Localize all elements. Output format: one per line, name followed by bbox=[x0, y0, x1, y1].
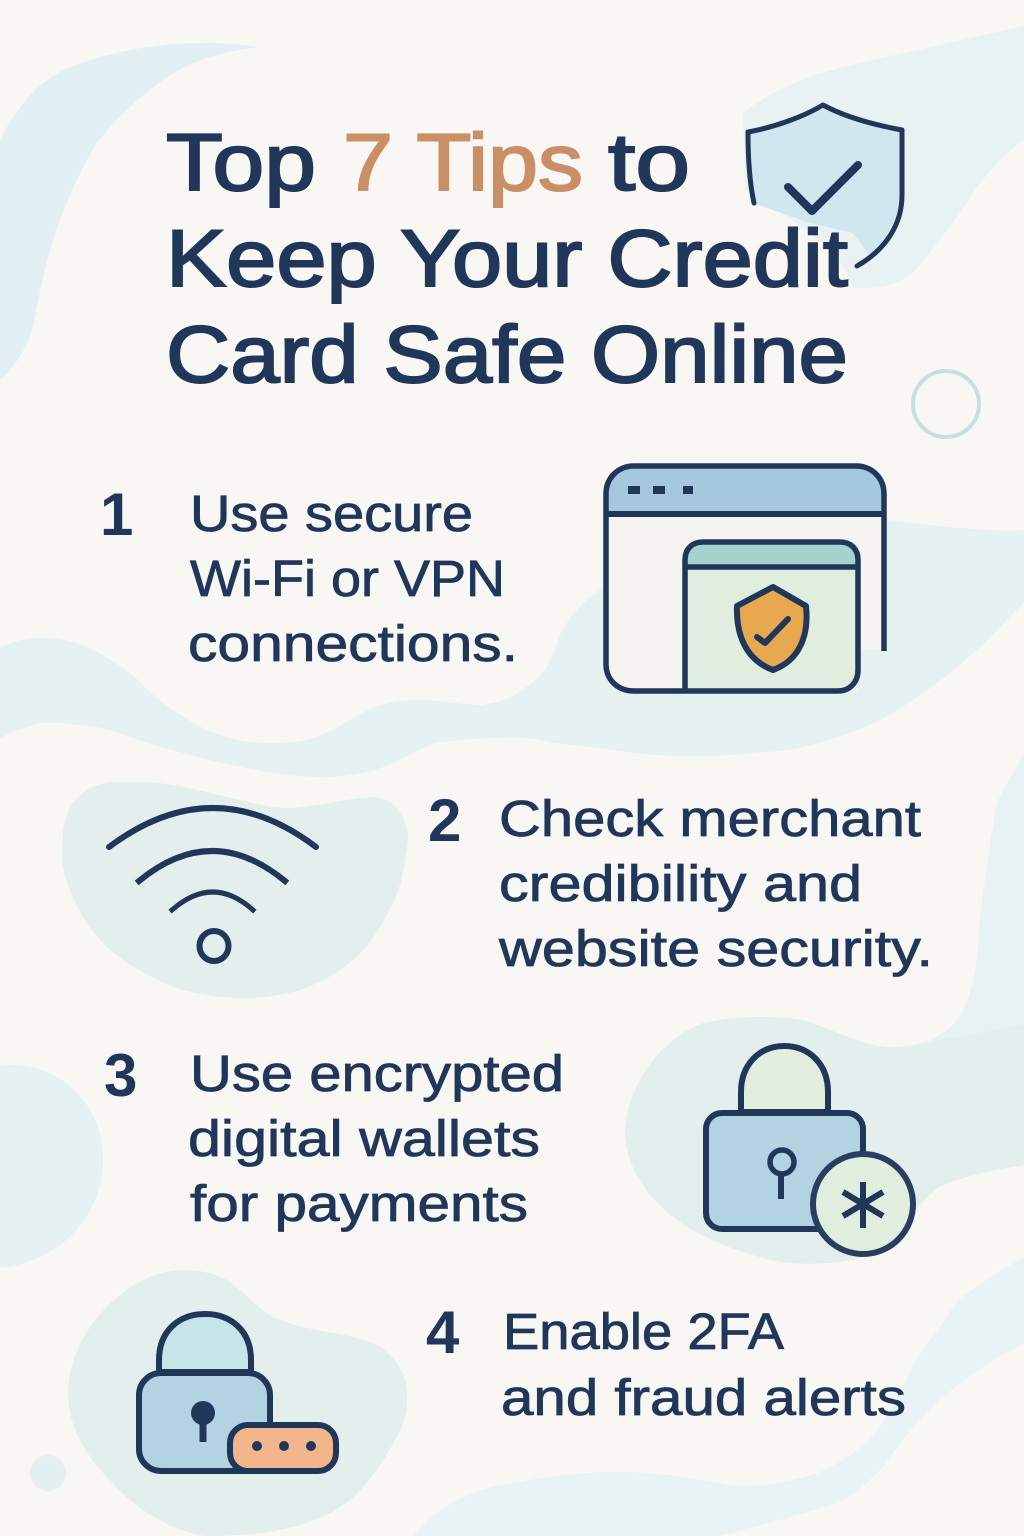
title: 7 Tips bbox=[343, 118, 583, 208]
tip 1: text bbox=[188, 485, 518, 672]
tip 3: text: Use encrypted bbox=[190, 1045, 564, 1102]
tip 3: text: digital wallets bbox=[188, 1110, 540, 1167]
tip 2: number: 2 bbox=[428, 787, 461, 854]
tip 4: text: Enable 2FA bbox=[503, 1303, 784, 1360]
tip 4: text: and fraud alerts bbox=[501, 1369, 906, 1426]
tip 3: text bbox=[188, 1045, 564, 1232]
background blob: right edge bbox=[900, 753, 1024, 1060]
tip 1: text: Use secure bbox=[190, 485, 473, 542]
tip 3: text: for payments bbox=[190, 1175, 528, 1232]
tip 1: number: 1 bbox=[100, 481, 133, 548]
tip 3: number: 3 bbox=[104, 1042, 137, 1109]
background blob: left edge bbox=[0, 1065, 103, 1268]
tip 1: text: Wi-Fi or VPN bbox=[190, 550, 505, 607]
title: Keep Your Credit bbox=[166, 214, 848, 304]
background blob: bottom right bbox=[412, 1257, 1024, 1536]
background blob: top left bbox=[0, 43, 258, 380]
icon: padlock with asterisk on blob bbox=[625, 1017, 1024, 1264]
icon: padlock with password field on blob bbox=[68, 1270, 407, 1536]
icon: shield with check bbox=[748, 105, 902, 266]
tip 2: text: website security. bbox=[498, 920, 933, 977]
tip 2: text: Check merchant bbox=[499, 790, 921, 847]
background blob: top right bbox=[743, 26, 1024, 288]
tip 2: text bbox=[498, 790, 933, 977]
icon: wifi on blob bbox=[62, 782, 408, 998]
background wave: middle bbox=[0, 520, 1024, 777]
decorative ring bbox=[913, 371, 979, 437]
title: Card Safe Online bbox=[166, 310, 848, 400]
decorative dot: bottom left bbox=[30, 1455, 66, 1491]
title: to bbox=[608, 118, 690, 208]
tip 4: text bbox=[501, 1303, 906, 1426]
tip 1: text: connections. bbox=[188, 615, 518, 672]
tip 2: text: credibility and bbox=[499, 855, 862, 912]
icon: browser window with shield bbox=[606, 466, 884, 691]
title bbox=[166, 118, 848, 400]
tip 4: number: 4 bbox=[426, 1299, 460, 1366]
title: Top bbox=[166, 118, 316, 208]
